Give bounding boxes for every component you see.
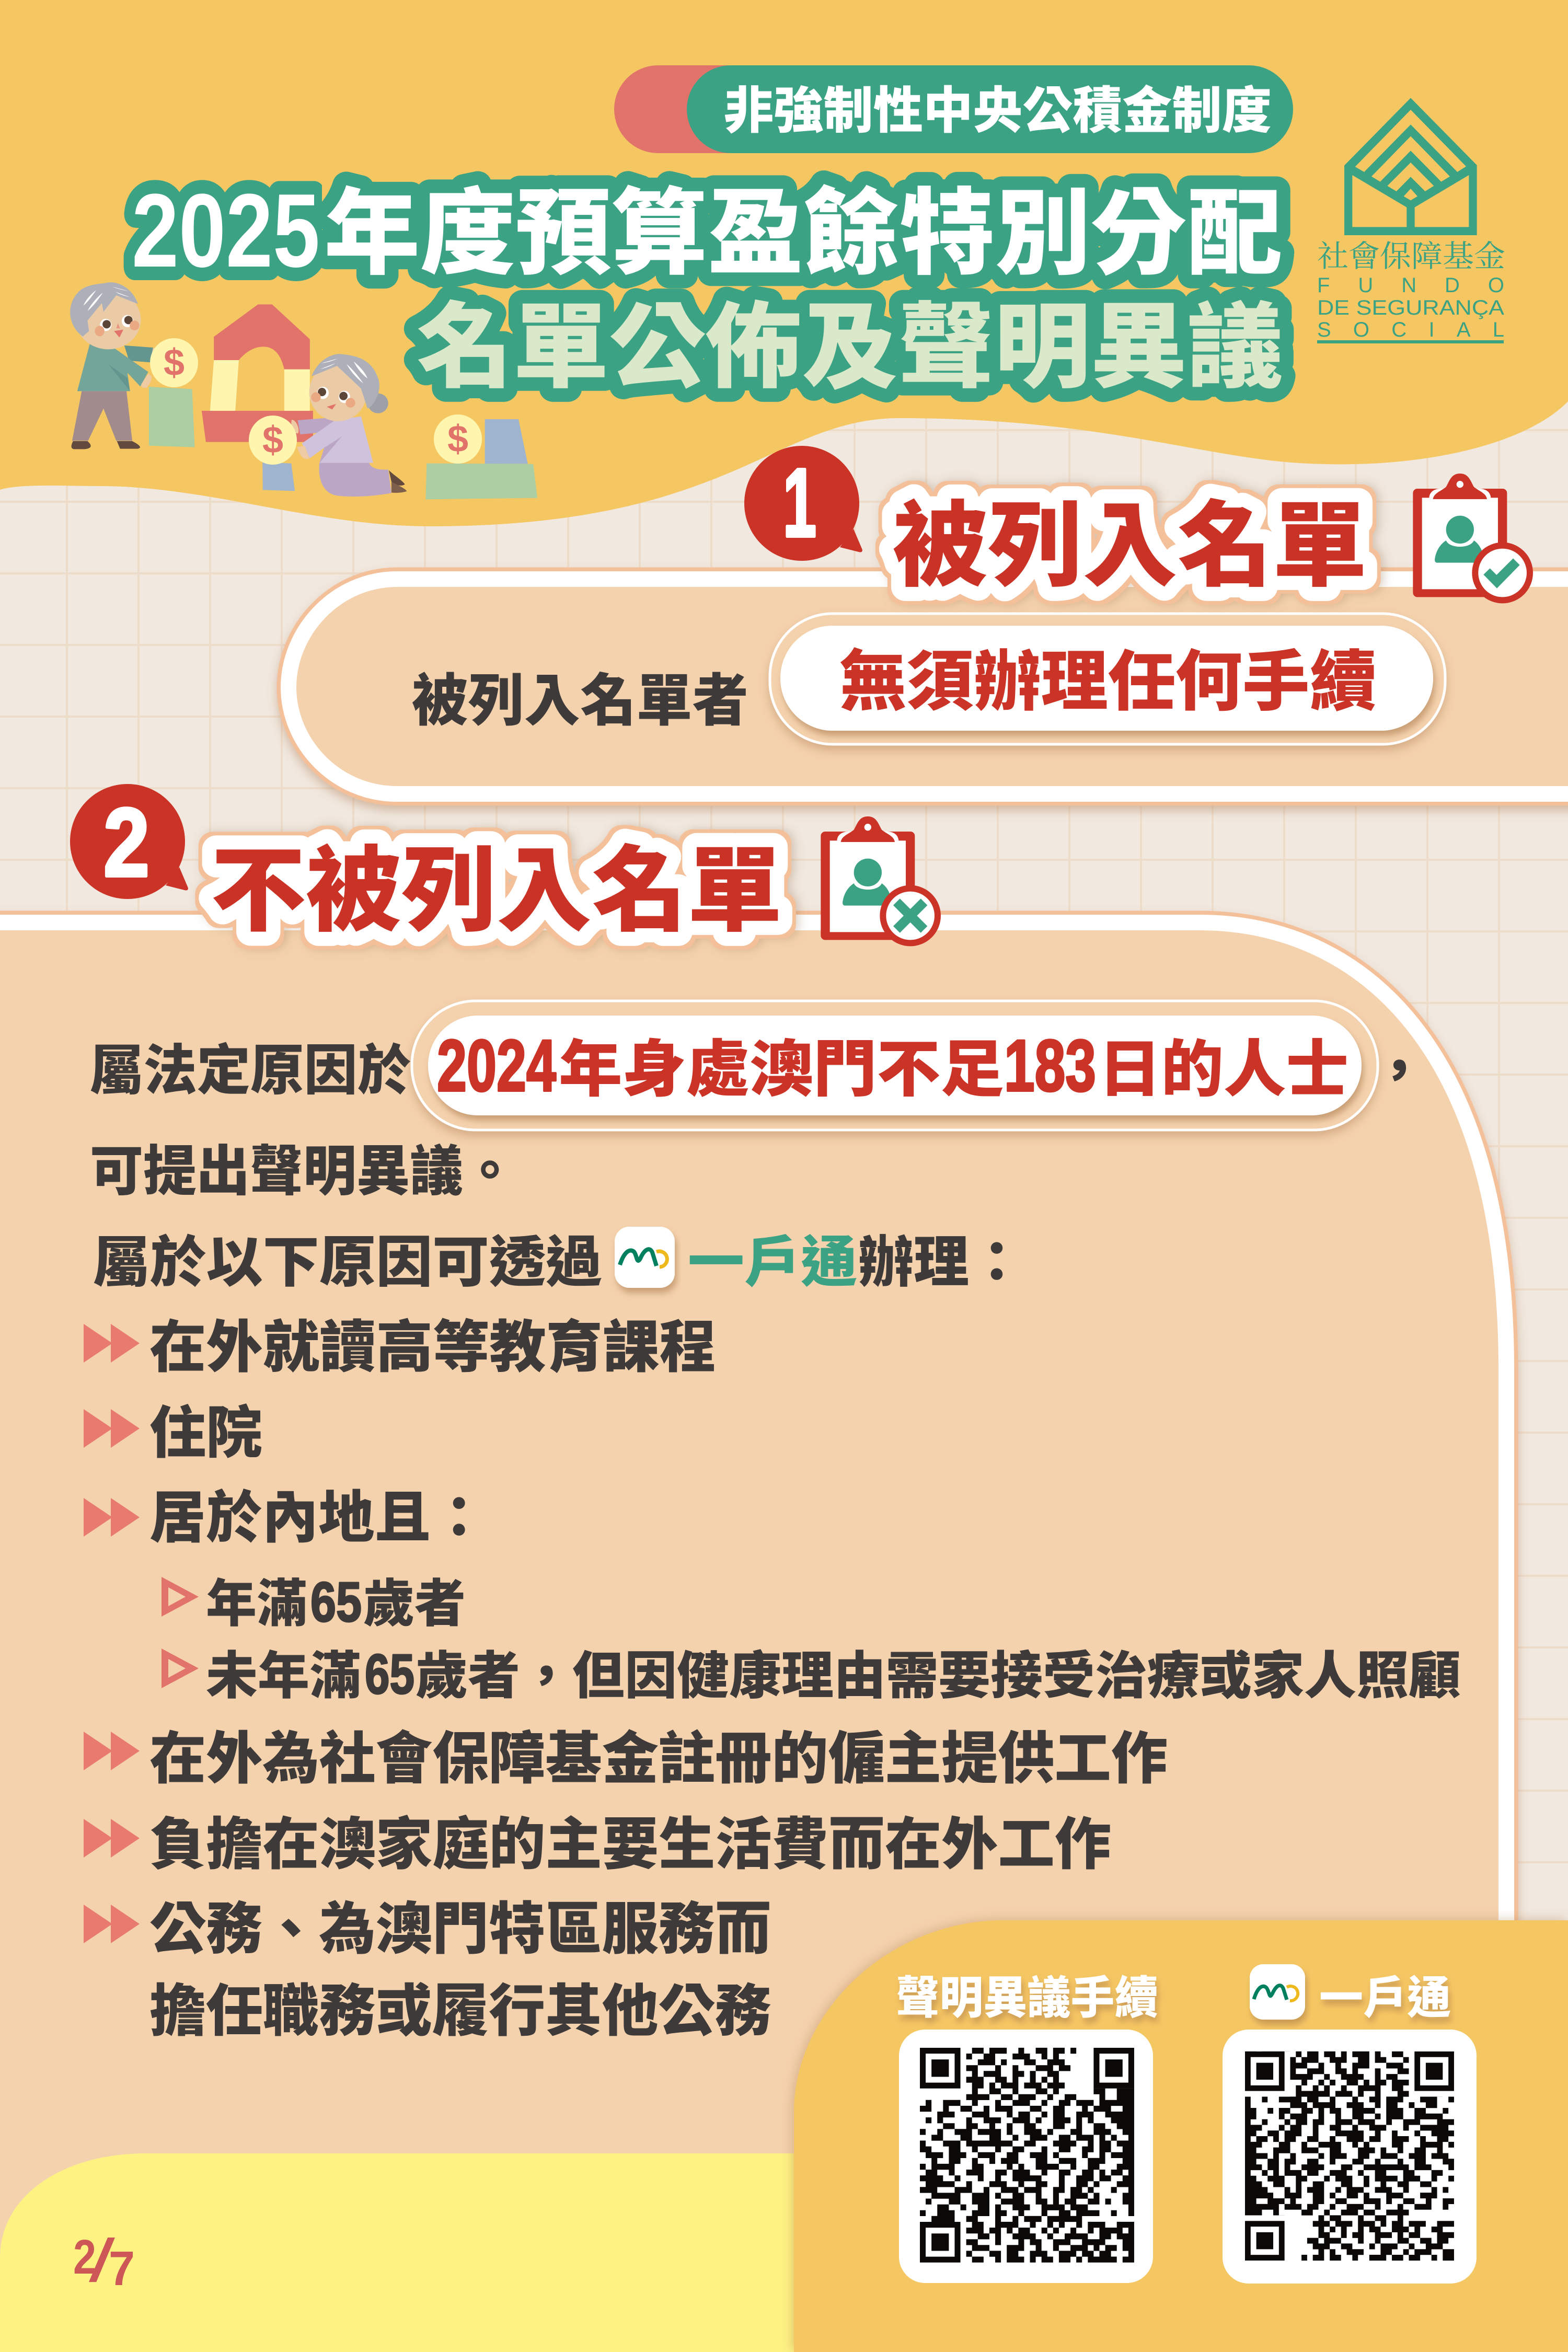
panel 1 label: 被列入名單者	[412, 669, 748, 732]
icon: clipboard cross	[821, 816, 938, 943]
logo: social security fund: DE SEGURANÇA	[1317, 296, 1504, 319]
sub item: under 65: 歲者，但因健康理由需要接受治療或家人照顧	[416, 1647, 1461, 1704]
list item: public service: 擔任職務或履行其他公務	[149, 1979, 771, 2043]
list item: hospital	[84, 1401, 262, 1465]
logo: social security fund: SOCIAL	[1317, 318, 1504, 341]
page number: 2	[73, 2230, 96, 2284]
illustration: elderly couple with blocks and coins	[70, 282, 537, 499]
sub item: under 65: 65	[365, 1642, 414, 1705]
list item: household: 負擔在澳家庭的主要生活費而在外工作	[149, 1813, 1111, 1876]
icon: clipboard check	[1413, 474, 1530, 600]
highlight pill: under 183 days: 日的人士	[1099, 1035, 1348, 1104]
badge: number 2	[70, 784, 188, 899]
text: may object: 可提出聲明異議。	[90, 1142, 516, 1202]
highlight pill: under 183 days: 2024	[437, 1024, 556, 1106]
QR panel	[794, 1920, 1568, 2352]
text: statutory reason: 屬法定原因於	[90, 1041, 411, 1101]
panel 1 highlight pill	[770, 614, 1445, 744]
QR code: one account	[1223, 2030, 1477, 2284]
subtitle pill	[614, 65, 1293, 153]
elderly man	[70, 282, 158, 449]
sub item: over 65: 年滿	[206, 1575, 307, 1632]
coins: $	[262, 419, 283, 461]
sub item: over 65: 65	[310, 1570, 362, 1633]
green block	[149, 387, 194, 447]
blue and green blocks	[262, 419, 537, 499]
yellow bottom-left corner	[0, 2153, 889, 2352]
page number: /	[89, 2227, 116, 2295]
coins: $	[447, 418, 468, 460]
sub item: over 65	[162, 1570, 466, 1633]
heading 1: 被列入名單	[893, 494, 1367, 598]
title line 1: 2025	[132, 172, 320, 289]
list of reasons	[84, 1316, 1461, 2043]
heading 2: 不被列入名單	[211, 839, 782, 943]
list item: mainland: 居於內地且：	[149, 1486, 487, 1549]
coins: $	[164, 342, 185, 384]
panel 1 highlight pill: 無須辦理任何手續	[839, 645, 1377, 719]
list item: studying: 在外就讀高等教育課程	[149, 1316, 716, 1379]
logo: social security fund: 社會保障基金	[1317, 232, 1505, 275]
panel 2: not listed	[0, 923, 1506, 2326]
sub item: over 65: 歲者	[363, 1575, 466, 1632]
badge: number 1	[744, 446, 862, 561]
list item: public service	[84, 1897, 771, 2043]
text: via the One Account: 屬於以下原因可透過	[93, 1232, 602, 1294]
badge: number 2: 2	[103, 789, 149, 897]
title line 2: 名單公佈及聲明異議	[417, 295, 1283, 399]
icon: one account app small	[1250, 1964, 1305, 2020]
coins	[150, 338, 482, 465]
top yellow wave header	[0, 0, 1568, 526]
heading: objection procedure: 聲明異議手續	[896, 1973, 1158, 2023]
page number: 7	[109, 2241, 135, 2296]
list item: public service: 公務、為澳門特區服務而	[149, 1897, 771, 1961]
highlight pill: under 183 days	[412, 1001, 1378, 1130]
heading: one account: 一戶通	[1319, 1973, 1451, 2023]
list item: employer: 在外為社會保障基金註冊的僱主提供工作	[149, 1727, 1168, 1790]
QR code: objection procedure	[899, 2030, 1153, 2283]
highlight pill: under 183 days: 年身處澳門不足	[559, 1035, 1004, 1104]
title line 1: 年度預算盈餘特別分配	[324, 181, 1283, 286]
icon: house logo	[1344, 98, 1477, 235]
icon: one account app	[615, 1227, 675, 1288]
list item: hospital: 住院	[149, 1401, 262, 1465]
logo: social security fund	[1317, 98, 1505, 343]
subtitle pill: 非強制性中央公積金制度	[724, 83, 1272, 139]
blocks and characters	[70, 282, 537, 499]
badge: number 1: 1	[783, 449, 816, 557]
block house	[202, 304, 313, 442]
sub item: under 65: 未年滿	[206, 1647, 361, 1704]
comma: ，	[1372, 1041, 1426, 1101]
highlight pill: under 183 days: 183	[1004, 1024, 1096, 1106]
text: process: 辦理：	[858, 1232, 1024, 1294]
logo: social security fund: FUNDO	[1317, 274, 1504, 297]
elderly woman	[291, 354, 407, 497]
text: one account name: 一戶通	[688, 1232, 857, 1294]
panel 1: listed	[289, 579, 1568, 794]
